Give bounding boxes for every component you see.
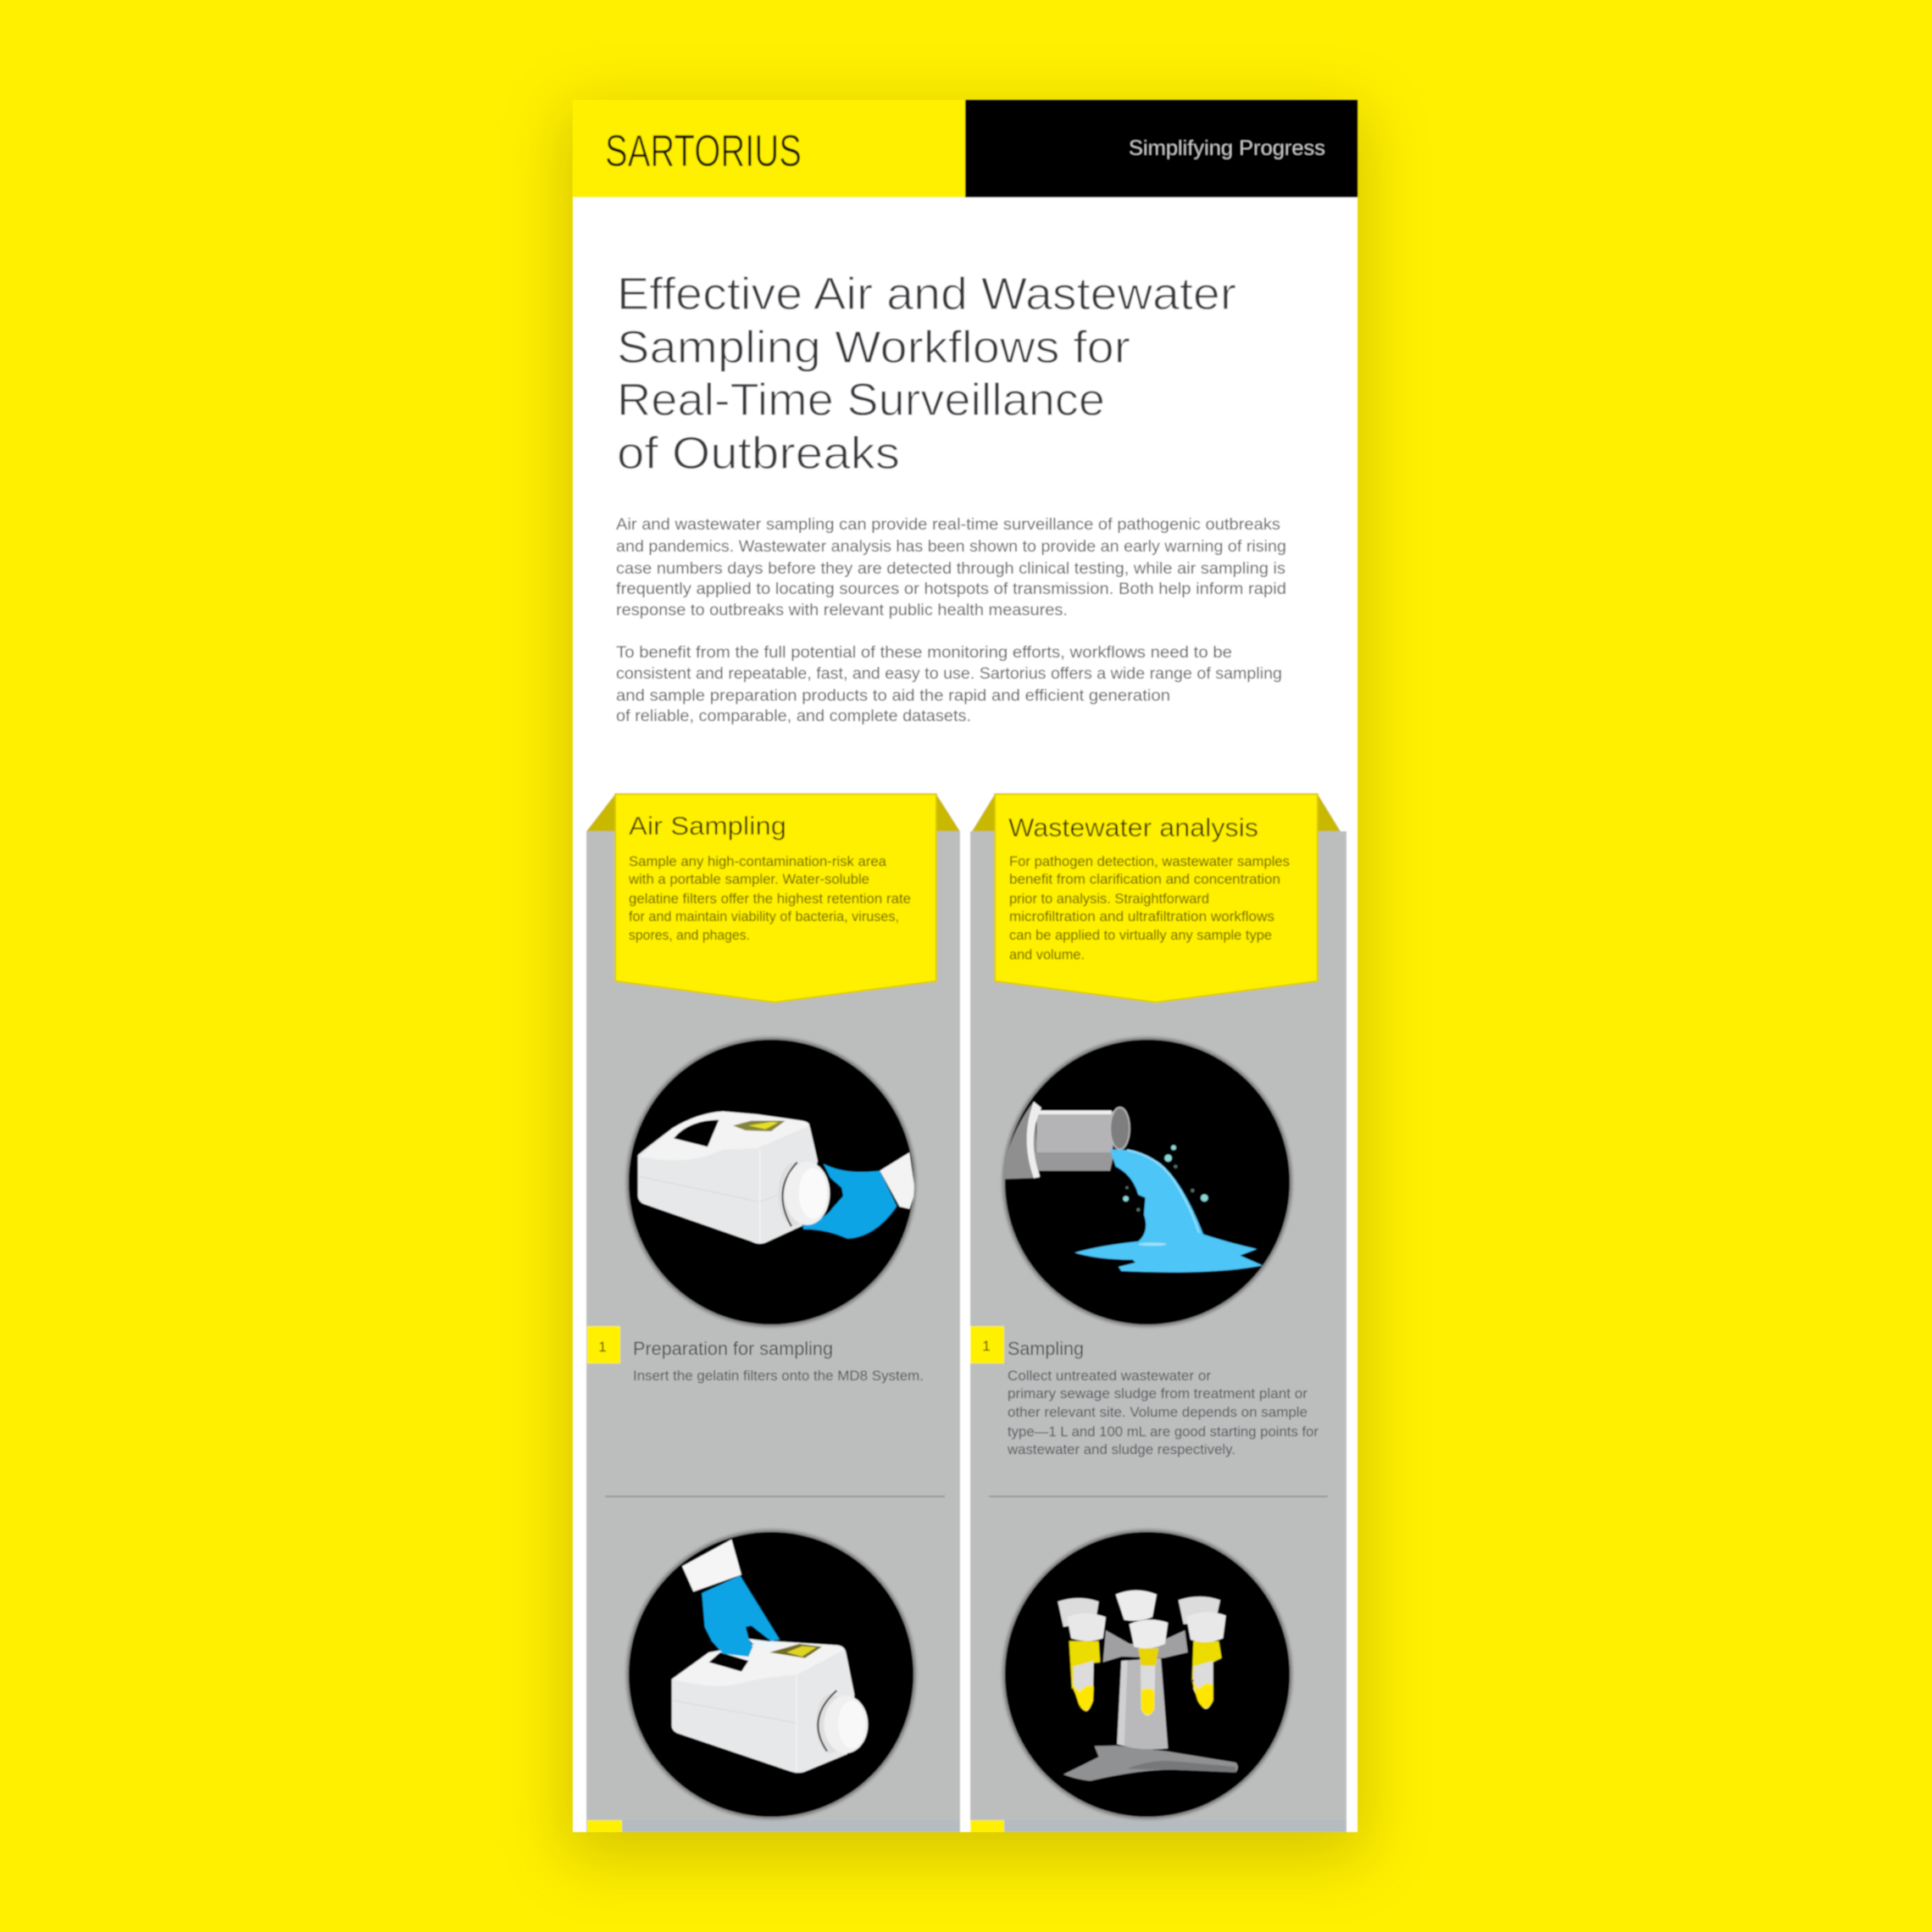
step 1 text: other relevant site. Volume depends on sample (1008, 1404, 1307, 1420)
intro paragraph 1: frequently applied to locating sources or hotspots of transmission. Both help inform rapid (616, 580, 1286, 598)
ribbon text: Sample any high-contamination-risk area (629, 853, 887, 869)
intro paragraph 1: case numbers days before they are detected through clinical testing, while air sampling is (616, 560, 1285, 578)
step 1 badge: 1 (598, 1339, 607, 1355)
step 1 text: wastewater and sludge respectively. (1007, 1441, 1235, 1457)
ribbon text: can be applied to virtually any sample type (1009, 927, 1272, 943)
tagline panel (965, 100, 1357, 197)
icon: sampler with gloved hand loading filter (626, 1037, 916, 1327)
divider (989, 1496, 1328, 1497)
step 1 text: type—1 L and 100 mL are good starting points for (1008, 1424, 1319, 1440)
circle rim (626, 1037, 916, 1327)
intro paragraph 2: To benefit from the full potential of these monitoring efforts, workflows need to be (616, 644, 1232, 662)
title (617, 269, 1236, 479)
grey column (970, 831, 1346, 1820)
bottom strip (970, 1820, 1346, 1832)
card shadow (573, 100, 1357, 1832)
circle background (1005, 1532, 1290, 1817)
circle background (1005, 1040, 1290, 1324)
infographic (571, 98, 1359, 1834)
intro paragraph 2: and sample preparation products to aid the rapid and efficient generation (616, 687, 1170, 705)
step 1 text: Collect untreated wastewater or (1008, 1368, 1211, 1384)
title: Sampling Workflows for (617, 322, 1130, 373)
illustration (672, 1540, 868, 1773)
ribbon text: with a portable sampler. Water-soluble (628, 871, 869, 887)
bottom strip (586, 1820, 960, 1832)
panel: air sampling (586, 794, 960, 1832)
ribbon text (1009, 853, 1290, 963)
grey column (586, 831, 960, 1820)
circle rim (626, 1530, 916, 1819)
illustration (1058, 1591, 1238, 1781)
ribbon (615, 794, 936, 1002)
circle rim (1002, 1037, 1292, 1327)
illustration (638, 1112, 915, 1244)
intro paragraph 1: and pandemics. Wastewater analysis has been shown to provide an early warning of rising (616, 538, 1286, 556)
ribbon heading: Wastewater analysis (1008, 813, 1258, 842)
ribbon text: gelatine filters offer the highest retention rate (629, 891, 911, 907)
step 1 heading: Preparation for sampling (633, 1338, 833, 1359)
intro paragraph 1 (616, 516, 1286, 619)
intro paragraph 2: of reliable, comparable, and complete datasets. (616, 708, 971, 725)
icon: filtration stand with funnels (1002, 1530, 1292, 1819)
ribbon text: microfiltration and ultrafiltration workflows (1009, 908, 1274, 924)
divider (605, 1496, 945, 1497)
tagline: Simplifying Progress (1129, 136, 1325, 160)
step 1 text: primary sewage sludge from treatment plant or (1008, 1385, 1307, 1402)
icon: pipe pouring wastewater (1000, 1037, 1292, 1327)
step 1 text (1007, 1368, 1319, 1457)
title: Effective Air and Wastewater (617, 269, 1236, 319)
ribbon heading: Air Sampling (629, 811, 786, 841)
ribbon text: and volume. (1009, 947, 1085, 963)
logo: Sartorius: SARTORIUS (605, 126, 802, 176)
step 1 heading: Sampling (1008, 1338, 1084, 1359)
intro paragraph 1: Air and wastewater sampling can provide real-time surveillance of pathogenic outbreaks (616, 516, 1280, 534)
step 2 badge (cropped) (970, 1820, 1004, 1832)
ribbon text (628, 853, 911, 943)
step 1 text: Insert the gelatin filters onto the MD8 System. (633, 1368, 924, 1384)
page content (573, 100, 1357, 1832)
circle background (629, 1532, 913, 1817)
header band (573, 100, 1357, 197)
ribbon text: For pathogen detection, wastewater samples (1009, 853, 1290, 869)
ribbon (995, 794, 1318, 1002)
ribbon text: benefit from clarification and concentration (1009, 871, 1280, 887)
white card (573, 100, 1357, 1832)
icon: sampler with hand pressing button (626, 1530, 916, 1819)
intro paragraph 2 (616, 644, 1282, 725)
ribbon text: prior to analysis. Straightforward (1009, 891, 1209, 907)
ribbon text: spores, and phages. (629, 927, 750, 943)
intro paragraph 1: response to outbreaks with relevant public health measures. (616, 602, 1068, 619)
ribbon folds (586, 794, 960, 831)
title: Real-Time Surveillance (617, 375, 1105, 425)
panel: wastewater analysis (970, 794, 1346, 1832)
step 1 badge: 1 (982, 1338, 991, 1354)
circle background (629, 1040, 913, 1324)
ribbon folds (972, 794, 1341, 831)
step 2 badge (cropped) (587, 1820, 622, 1832)
step 1 badge (970, 1326, 1004, 1363)
step 1 badge (587, 1326, 620, 1363)
intro paragraph 2: consistent and repeatable, fast, and easy to use. Sartorius offers a wide range of sampling (616, 665, 1282, 683)
illustration (1000, 1102, 1263, 1272)
circle rim (1002, 1530, 1292, 1819)
title: of Outbreaks (617, 428, 900, 479)
logo panel (573, 100, 965, 197)
ribbon text: for and maintain viability of bacteria, viruses, (629, 908, 899, 924)
